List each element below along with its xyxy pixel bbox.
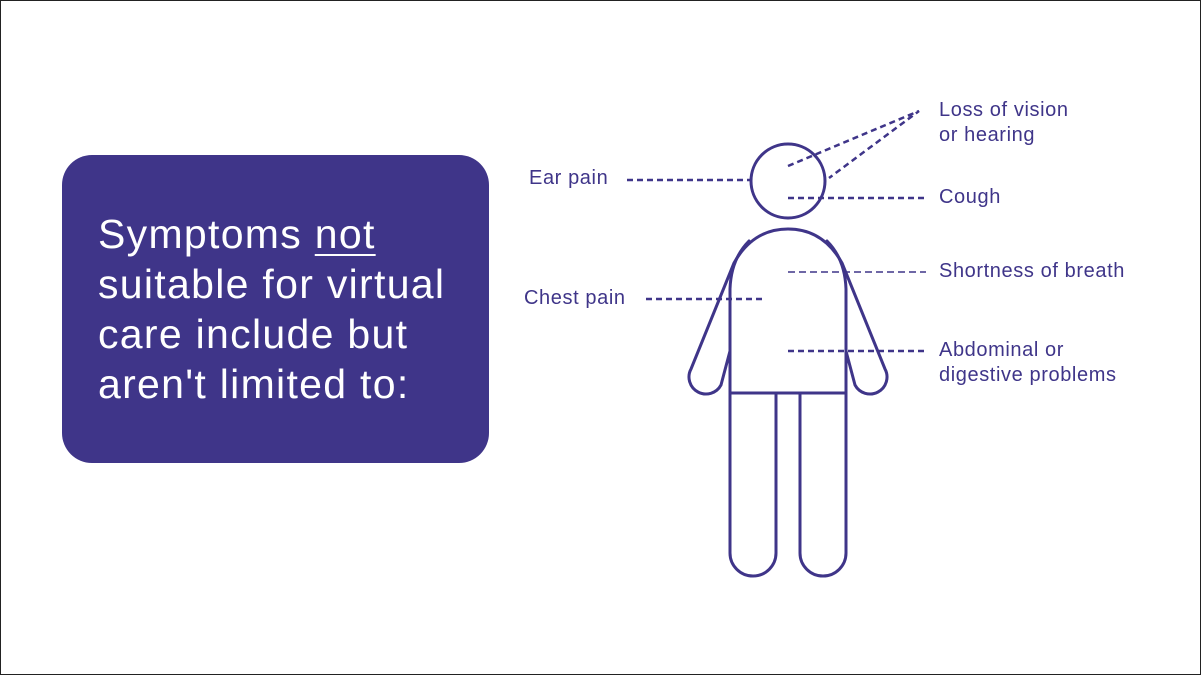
arrow: ear pain bbox=[627, 179, 751, 181]
panel: headline box bbox=[62, 155, 489, 463]
icon: head bbox=[751, 144, 825, 218]
icon: torso bbox=[730, 241, 846, 393]
label: shortness of breath: Shortness of breath bbox=[939, 260, 1125, 282]
icon: legs bbox=[730, 393, 846, 576]
label: chest pain: Chest pain bbox=[524, 287, 626, 309]
label: loss of vision bbox=[939, 99, 1069, 146]
arrow: chest pain bbox=[646, 298, 766, 300]
arrow: abdominal bbox=[788, 350, 926, 352]
heading text: Symptoms not bbox=[98, 211, 376, 257]
label: loss of vision: or hearing bbox=[939, 124, 1035, 146]
label: loss of vision: Loss of vision bbox=[939, 99, 1069, 121]
arrow: cough bbox=[788, 197, 926, 199]
heading text: care include but bbox=[98, 311, 408, 357]
heading text: aren't limited to: bbox=[98, 361, 410, 407]
label: abdominal bbox=[939, 339, 1117, 386]
label: ear pain: Ear pain bbox=[529, 167, 608, 189]
arrow: vision bbox=[788, 111, 919, 178]
arrow: shortness of breath bbox=[788, 271, 926, 273]
icon: shoulders and arms bbox=[689, 229, 887, 394]
label: abdominal: Abdominal or bbox=[939, 339, 1064, 361]
label: abdominal: digestive problems bbox=[939, 364, 1117, 386]
label: cough: Cough bbox=[939, 186, 1001, 208]
heading text: suitable for virtual bbox=[98, 261, 445, 307]
heading text bbox=[98, 211, 445, 407]
